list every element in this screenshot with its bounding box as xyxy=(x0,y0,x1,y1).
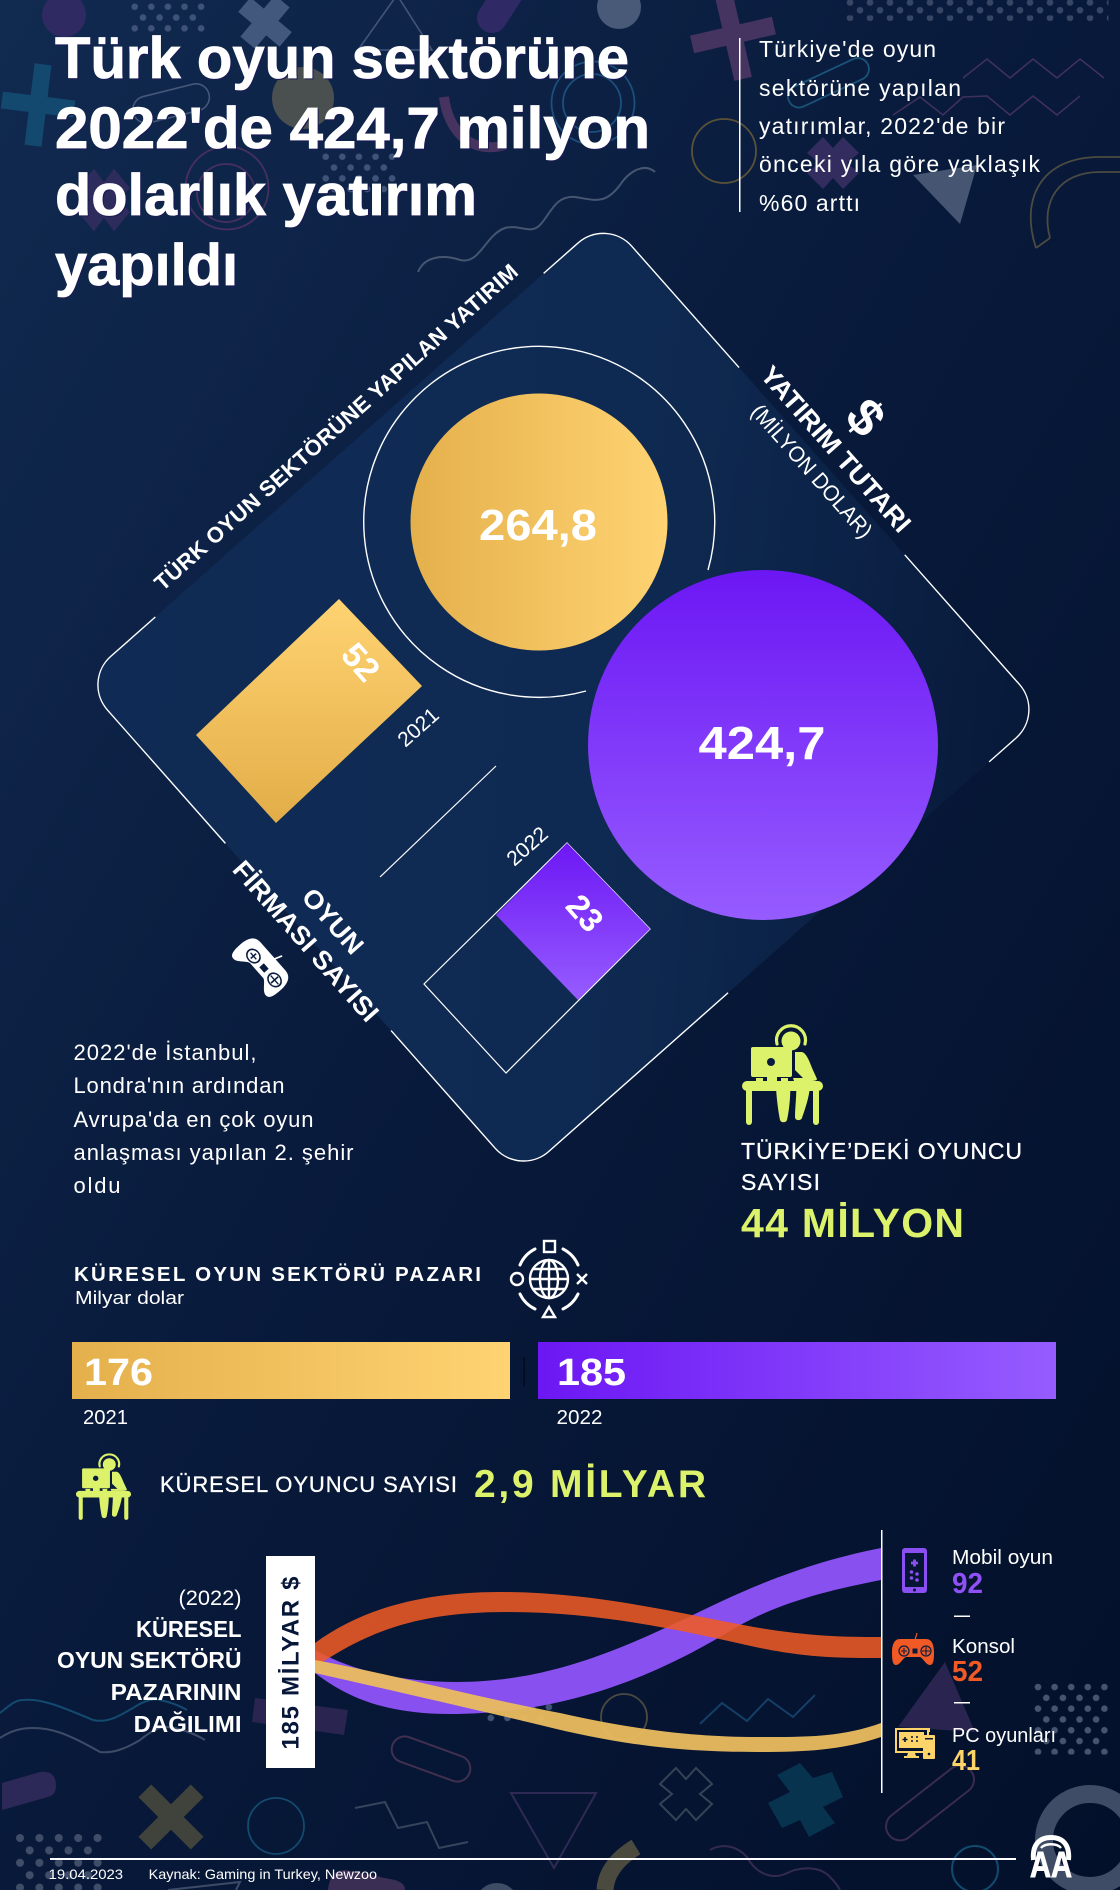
diamond 2022 companies: 23 xyxy=(559,887,611,939)
ring around 2021 circle xyxy=(364,346,715,697)
global market heading: KÜRESEL OYUN SEKTÖRÜ PAZARI xyxy=(74,1263,481,1286)
circle 2022 investment xyxy=(588,570,938,920)
amount label: YATIRIM TUTARI xyxy=(754,360,917,538)
legend: console: Konsol xyxy=(952,1636,1015,1658)
title xyxy=(55,26,650,298)
total label box: 185 MİLYAR $ xyxy=(278,1576,305,1750)
icon: gamer at desk xyxy=(742,1026,823,1125)
title: dolarlık yatırım xyxy=(55,163,477,228)
bar 2022: 185 xyxy=(557,1352,626,1394)
Turkey player count xyxy=(741,1138,1022,1246)
Turkey player count: TÜRKİYE’DEKİ OYUNCU xyxy=(741,1138,1022,1164)
circle 2021 investment: 264,8 xyxy=(479,501,597,550)
bar 2021: 2021 xyxy=(83,1407,128,1429)
bar 2022 xyxy=(538,1342,1056,1429)
title: yapıldı xyxy=(55,233,238,298)
company count label: FİRMASI SAYISI xyxy=(227,854,385,1028)
stream: console xyxy=(315,1592,881,1667)
text: Istanbul note: Avrupa'da en çok oyun xyxy=(74,1107,314,1132)
icon: game controller xyxy=(229,929,298,1000)
footer source: 19.04.2023 xyxy=(49,1866,123,1882)
Turkey player count: SAYISI xyxy=(741,1169,820,1195)
amount label: (MİLYON DOLAR) xyxy=(746,399,878,543)
diamond 2021 companies: 52 xyxy=(334,636,387,689)
bar 2021 xyxy=(72,1342,510,1429)
intro text block xyxy=(739,36,1040,216)
total label box xyxy=(266,1556,315,1768)
intro text block: sektörüne yapılan xyxy=(759,75,961,101)
global market heading xyxy=(74,1263,481,1308)
year 2022: 2022 xyxy=(502,823,553,871)
distribution heading: KÜRESEL xyxy=(136,1616,242,1642)
Turkey player count: 44 MİLYON xyxy=(741,1200,964,1246)
text: Istanbul note: oldu xyxy=(74,1173,120,1198)
legend: mobile: Mobil oyun xyxy=(952,1547,1053,1569)
global player count: KÜRESEL OYUNCU SAYISI xyxy=(160,1472,457,1497)
diamond 2022 companies xyxy=(424,843,650,1073)
investment label: TÜRK OYUN SEKTÖRÜNE YAPILAN YATIRIM xyxy=(149,259,523,595)
legend: pc xyxy=(896,1725,1056,1777)
title: 2022'de 424,7 milyon xyxy=(55,96,650,161)
intro text block: yatırımlar, 2022'de bir xyxy=(759,113,1005,139)
text: Istanbul note: Londra'nın ardından xyxy=(74,1073,284,1098)
logo: AA: AA xyxy=(1030,1844,1072,1885)
stream chart xyxy=(315,1548,881,1752)
global player count: 2,9 MİLYAR xyxy=(474,1463,706,1506)
text: Istanbul note: anlaşması yapılan 2. şehir xyxy=(74,1140,354,1165)
stream: pc xyxy=(315,1660,881,1752)
diamond 2021 companies xyxy=(196,599,422,823)
legend: pc: 41 xyxy=(952,1745,980,1777)
icon: globe with controller symbols xyxy=(511,1241,587,1317)
intro text block: Türkiye'de oyun xyxy=(759,36,936,62)
legend: pc: PC oyunları xyxy=(952,1725,1056,1747)
circle 2021 investment xyxy=(410,394,668,650)
global market heading: Milyar dolar xyxy=(75,1287,184,1308)
circle 2022 investment: 424,7 xyxy=(698,717,826,769)
distribution heading: PAZARININ xyxy=(111,1679,242,1705)
title: Türk oyun sektörüne xyxy=(55,26,629,91)
text: Istanbul note: 2022'de İstanbul, xyxy=(74,1040,256,1065)
legend: console xyxy=(892,1633,1015,1688)
icon: gamer small xyxy=(76,1454,131,1520)
year 2021: 2021 xyxy=(393,704,444,752)
stream: mobile xyxy=(315,1548,881,1714)
footer source: Kaynak: Gaming in Turkey, Newzoo xyxy=(149,1866,377,1882)
intro text block: %60 arttı xyxy=(759,190,860,216)
panel: investment and company diamond xyxy=(82,218,1045,1177)
text: Istanbul note xyxy=(74,1040,354,1198)
icon: dollar: $ xyxy=(834,388,896,448)
intro text block: önceki yıla göre yaklaşık xyxy=(759,151,1040,177)
distribution heading: (2022) xyxy=(178,1587,242,1610)
distribution heading xyxy=(57,1587,242,1737)
legend: mobile xyxy=(902,1547,1053,1600)
footer source xyxy=(49,1866,377,1882)
bar 2022: 2022 xyxy=(556,1407,602,1429)
distribution heading: OYUN SEKTÖRÜ xyxy=(57,1647,242,1673)
company count label: OYUN xyxy=(296,882,370,960)
global player count xyxy=(160,1463,706,1506)
legend: mobile: 92 xyxy=(952,1568,983,1600)
distribution heading: DAĞILIMI xyxy=(134,1710,242,1737)
legend: console: 52 xyxy=(952,1656,983,1688)
bar 2021: 176 xyxy=(84,1352,153,1394)
